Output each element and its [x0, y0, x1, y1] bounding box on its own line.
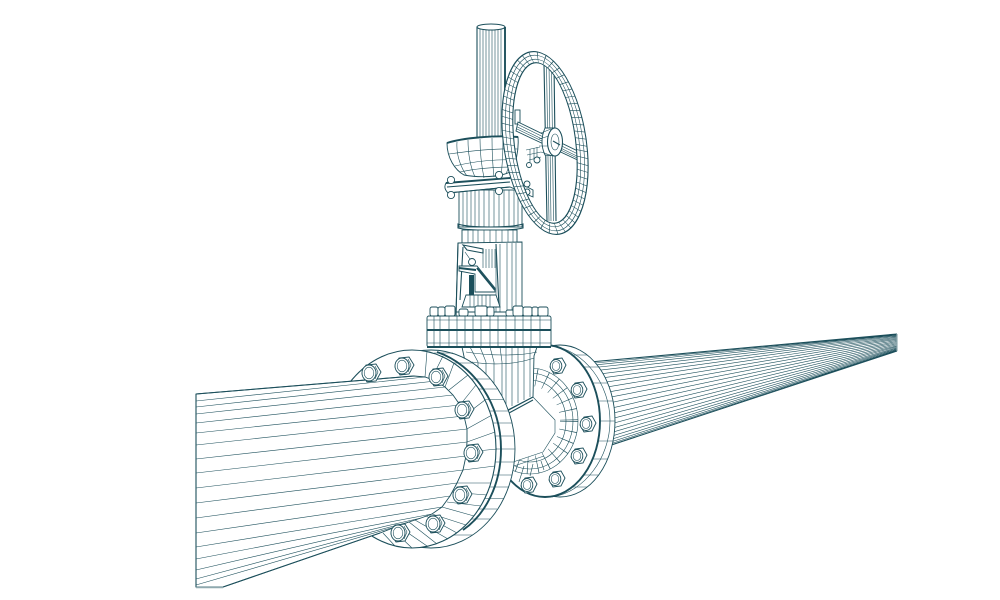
wheel rim torus: [495, 44, 595, 242]
handwheel column and collar: [458, 190, 523, 244]
far pipe running to the right: [590, 334, 897, 452]
left flange bolts: [362, 357, 483, 542]
gearbox bowl: [447, 136, 518, 178]
wheel hub: [539, 128, 562, 156]
valve body neck: [462, 347, 537, 415]
flange rim: [490, 345, 615, 497]
yoke bracket and nut: [459, 258, 500, 307]
bonnet flange bolts: [430, 306, 548, 316]
horizontal spoke: [516, 122, 586, 163]
vertical spoke: [544, 64, 556, 221]
yoke frame: [456, 242, 522, 316]
right flange bolts: [521, 358, 596, 493]
small gear parts behind hub: [515, 110, 541, 168]
handwheel: [495, 44, 595, 242]
bracket plate with bolts: [445, 171, 533, 199]
right flange: [482, 345, 615, 497]
left pipe: [196, 376, 467, 588]
flange face edge: [328, 350, 501, 548]
flange face radial segments: [383, 351, 497, 548]
left flange: [328, 350, 515, 548]
flange rim: [328, 350, 515, 548]
yoke right column: [496, 243, 516, 312]
tall stem: [477, 24, 505, 138]
flange face edge: [490, 345, 600, 497]
bonnet flange: [427, 316, 551, 347]
flange bore rings: [482, 368, 578, 482]
